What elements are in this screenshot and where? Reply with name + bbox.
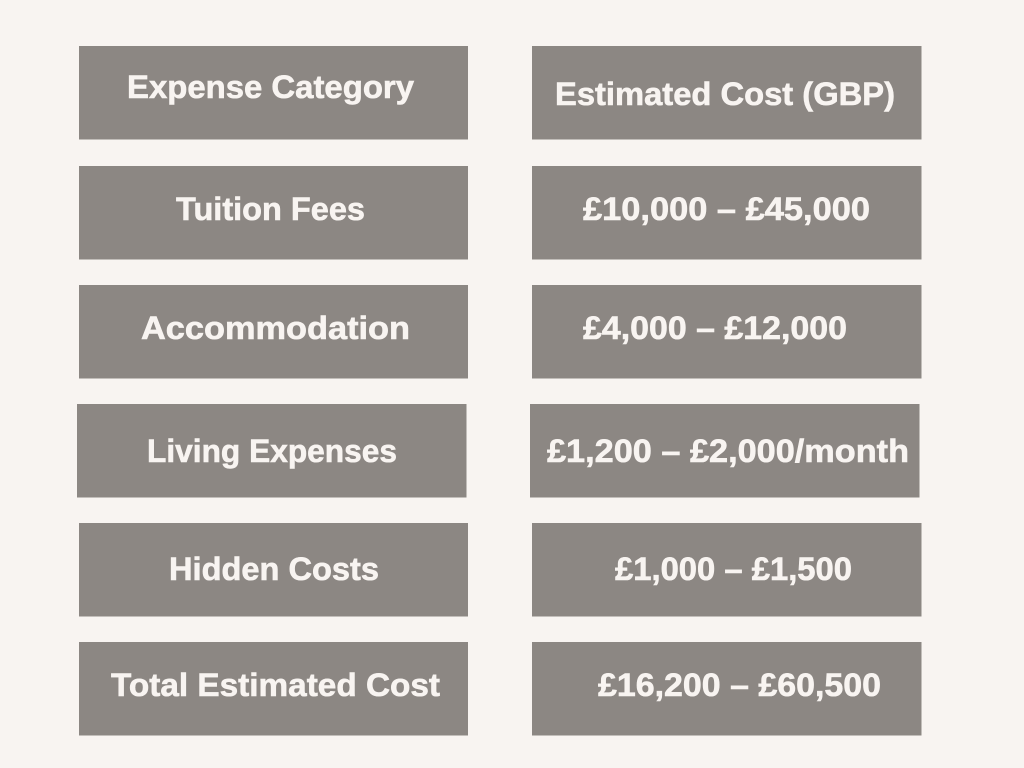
row value: tuition fees cost: £10,000 – £45,000 bbox=[583, 191, 870, 227]
row label: accommodation bbox=[79, 285, 468, 378]
row label: accommodation: Accommodation bbox=[141, 310, 410, 346]
row value: living expenses cost bbox=[530, 404, 920, 498]
row value: accommodation cost: £4,000 – £12,000 bbox=[583, 310, 847, 346]
header: estimated cost: Estimated Cost (GBP) bbox=[555, 76, 895, 112]
row value: total cost: £16,200 – £60,500 bbox=[598, 667, 881, 703]
row label: total estimated cost: Total Estimated Cost bbox=[111, 667, 440, 703]
header: expense category: Expense Category bbox=[127, 69, 414, 105]
row value: hidden costs amount bbox=[532, 523, 922, 616]
row value: living expenses cost: £1,200 – £2,000/month bbox=[547, 433, 909, 469]
row value: hidden costs amount: £1,000 – £1,500 bbox=[615, 551, 852, 587]
header: expense category bbox=[79, 46, 468, 140]
row label: living expenses bbox=[77, 404, 466, 498]
row value: tuition fees cost bbox=[532, 166, 922, 260]
row value: accommodation cost bbox=[532, 285, 922, 378]
header: estimated cost bbox=[532, 46, 922, 140]
row label: hidden costs bbox=[79, 523, 468, 616]
row value: total cost bbox=[532, 642, 922, 736]
row label: tuition fees: Tuition Fees bbox=[176, 191, 365, 227]
row label: living expenses: Living Expenses bbox=[147, 433, 397, 469]
row label: hidden costs: Hidden Costs bbox=[169, 551, 379, 587]
row label: tuition fees bbox=[79, 166, 468, 260]
row label: total estimated cost bbox=[79, 642, 468, 736]
